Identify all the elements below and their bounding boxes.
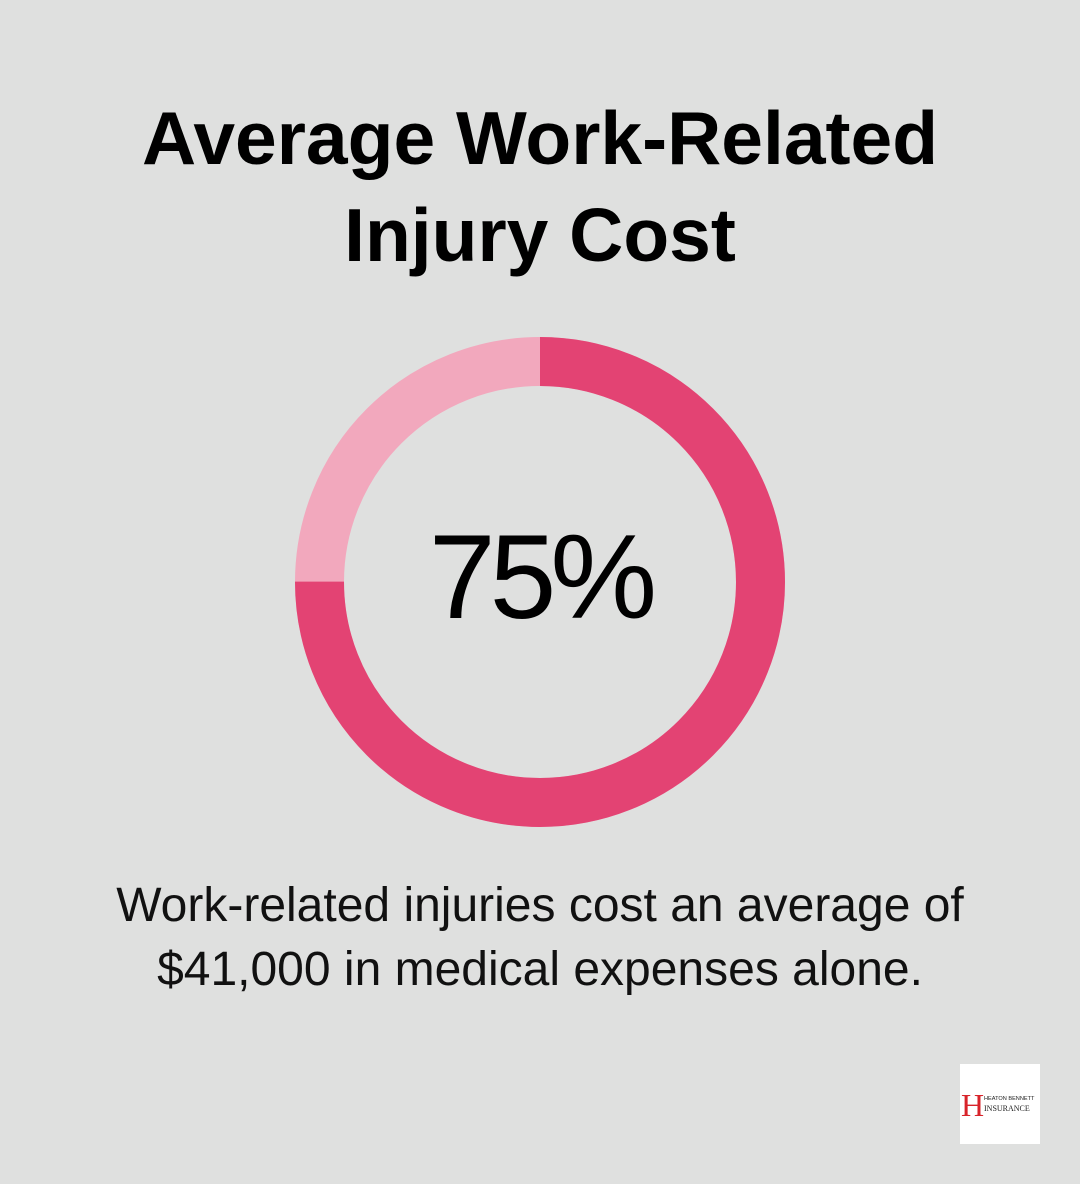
donut chart — [295, 337, 785, 827]
title — [142, 96, 938, 277]
donut chart: 75% — [429, 510, 653, 644]
logo — [960, 1064, 1040, 1144]
logo: HEATON BENNETT — [984, 1096, 1035, 1102]
logo: INSURANCE — [984, 1104, 1030, 1113]
title: Average Work-Related — [142, 96, 938, 180]
logo: H — [961, 1087, 984, 1123]
body text: Work-related injuries cost an average of — [116, 879, 964, 932]
title: Injury Cost — [344, 193, 736, 277]
body text: $41,000 in medical expenses alone. — [157, 943, 923, 996]
body text — [116, 879, 964, 996]
